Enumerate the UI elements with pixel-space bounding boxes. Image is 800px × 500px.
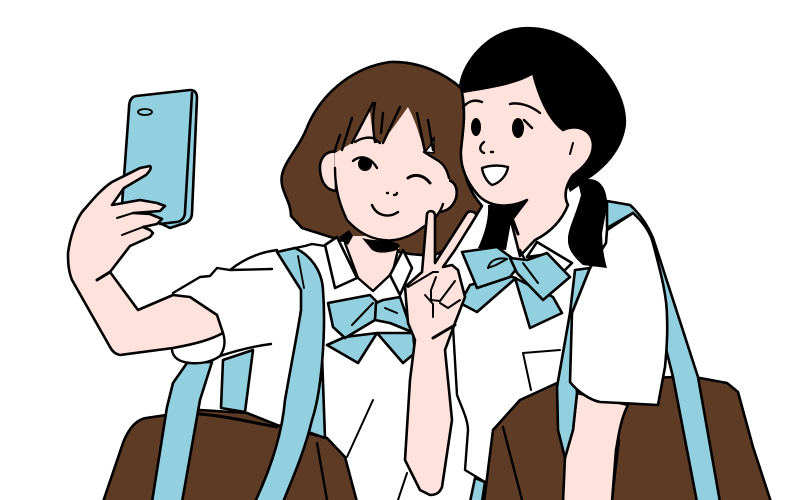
- left girl: bangs strokes: [335, 103, 434, 153]
- right girl: shoulder strap over arm: [607, 201, 720, 500]
- right girl: hair strand behind neck: [478, 200, 528, 250]
- phone: [122, 90, 197, 228]
- right girl: facial features: [463, 101, 573, 234]
- right girl: arm: [563, 393, 628, 500]
- right girl: black hair: [459, 27, 626, 192]
- left girl: bag strap behind: [221, 350, 253, 412]
- left girl: peace sign hand and forearm: [405, 211, 476, 495]
- right girl: ponytail: [568, 179, 607, 268]
- left girl: facial features: [353, 138, 430, 216]
- right girl: shirt body and pocket: [453, 327, 560, 500]
- left girl: bag: [103, 410, 357, 500]
- left girl: shirt fold lines: [347, 400, 407, 500]
- right girl: ponytail tip over sleeve: [568, 205, 607, 268]
- left girl: ears: [320, 152, 457, 212]
- right girl: bag: [484, 377, 771, 500]
- left girl: brown hair: [282, 62, 482, 256]
- left girl: hand and forearm holding phone: [68, 166, 224, 356]
- left girl: shirt sleeve: [172, 250, 277, 363]
- right girl: face and neck: [461, 73, 593, 256]
- left girl: face: [335, 107, 449, 240]
- left girl: collar: [325, 237, 412, 295]
- right girl: collar: [520, 242, 572, 272]
- left girl: shoulder strap: [255, 248, 324, 500]
- right girl: bow tie: [460, 247, 570, 328]
- right girl: inner strap: [557, 268, 590, 458]
- left girl: front bag strap: [152, 362, 212, 500]
- left girl: neck and chin shadow: [339, 230, 400, 291]
- left girl: back strap: [308, 355, 325, 438]
- left girl: bow tie: [327, 295, 415, 363]
- left girl: shirt shoulder line: [295, 244, 325, 248]
- right girl: shirt sleeve: [570, 213, 667, 405]
